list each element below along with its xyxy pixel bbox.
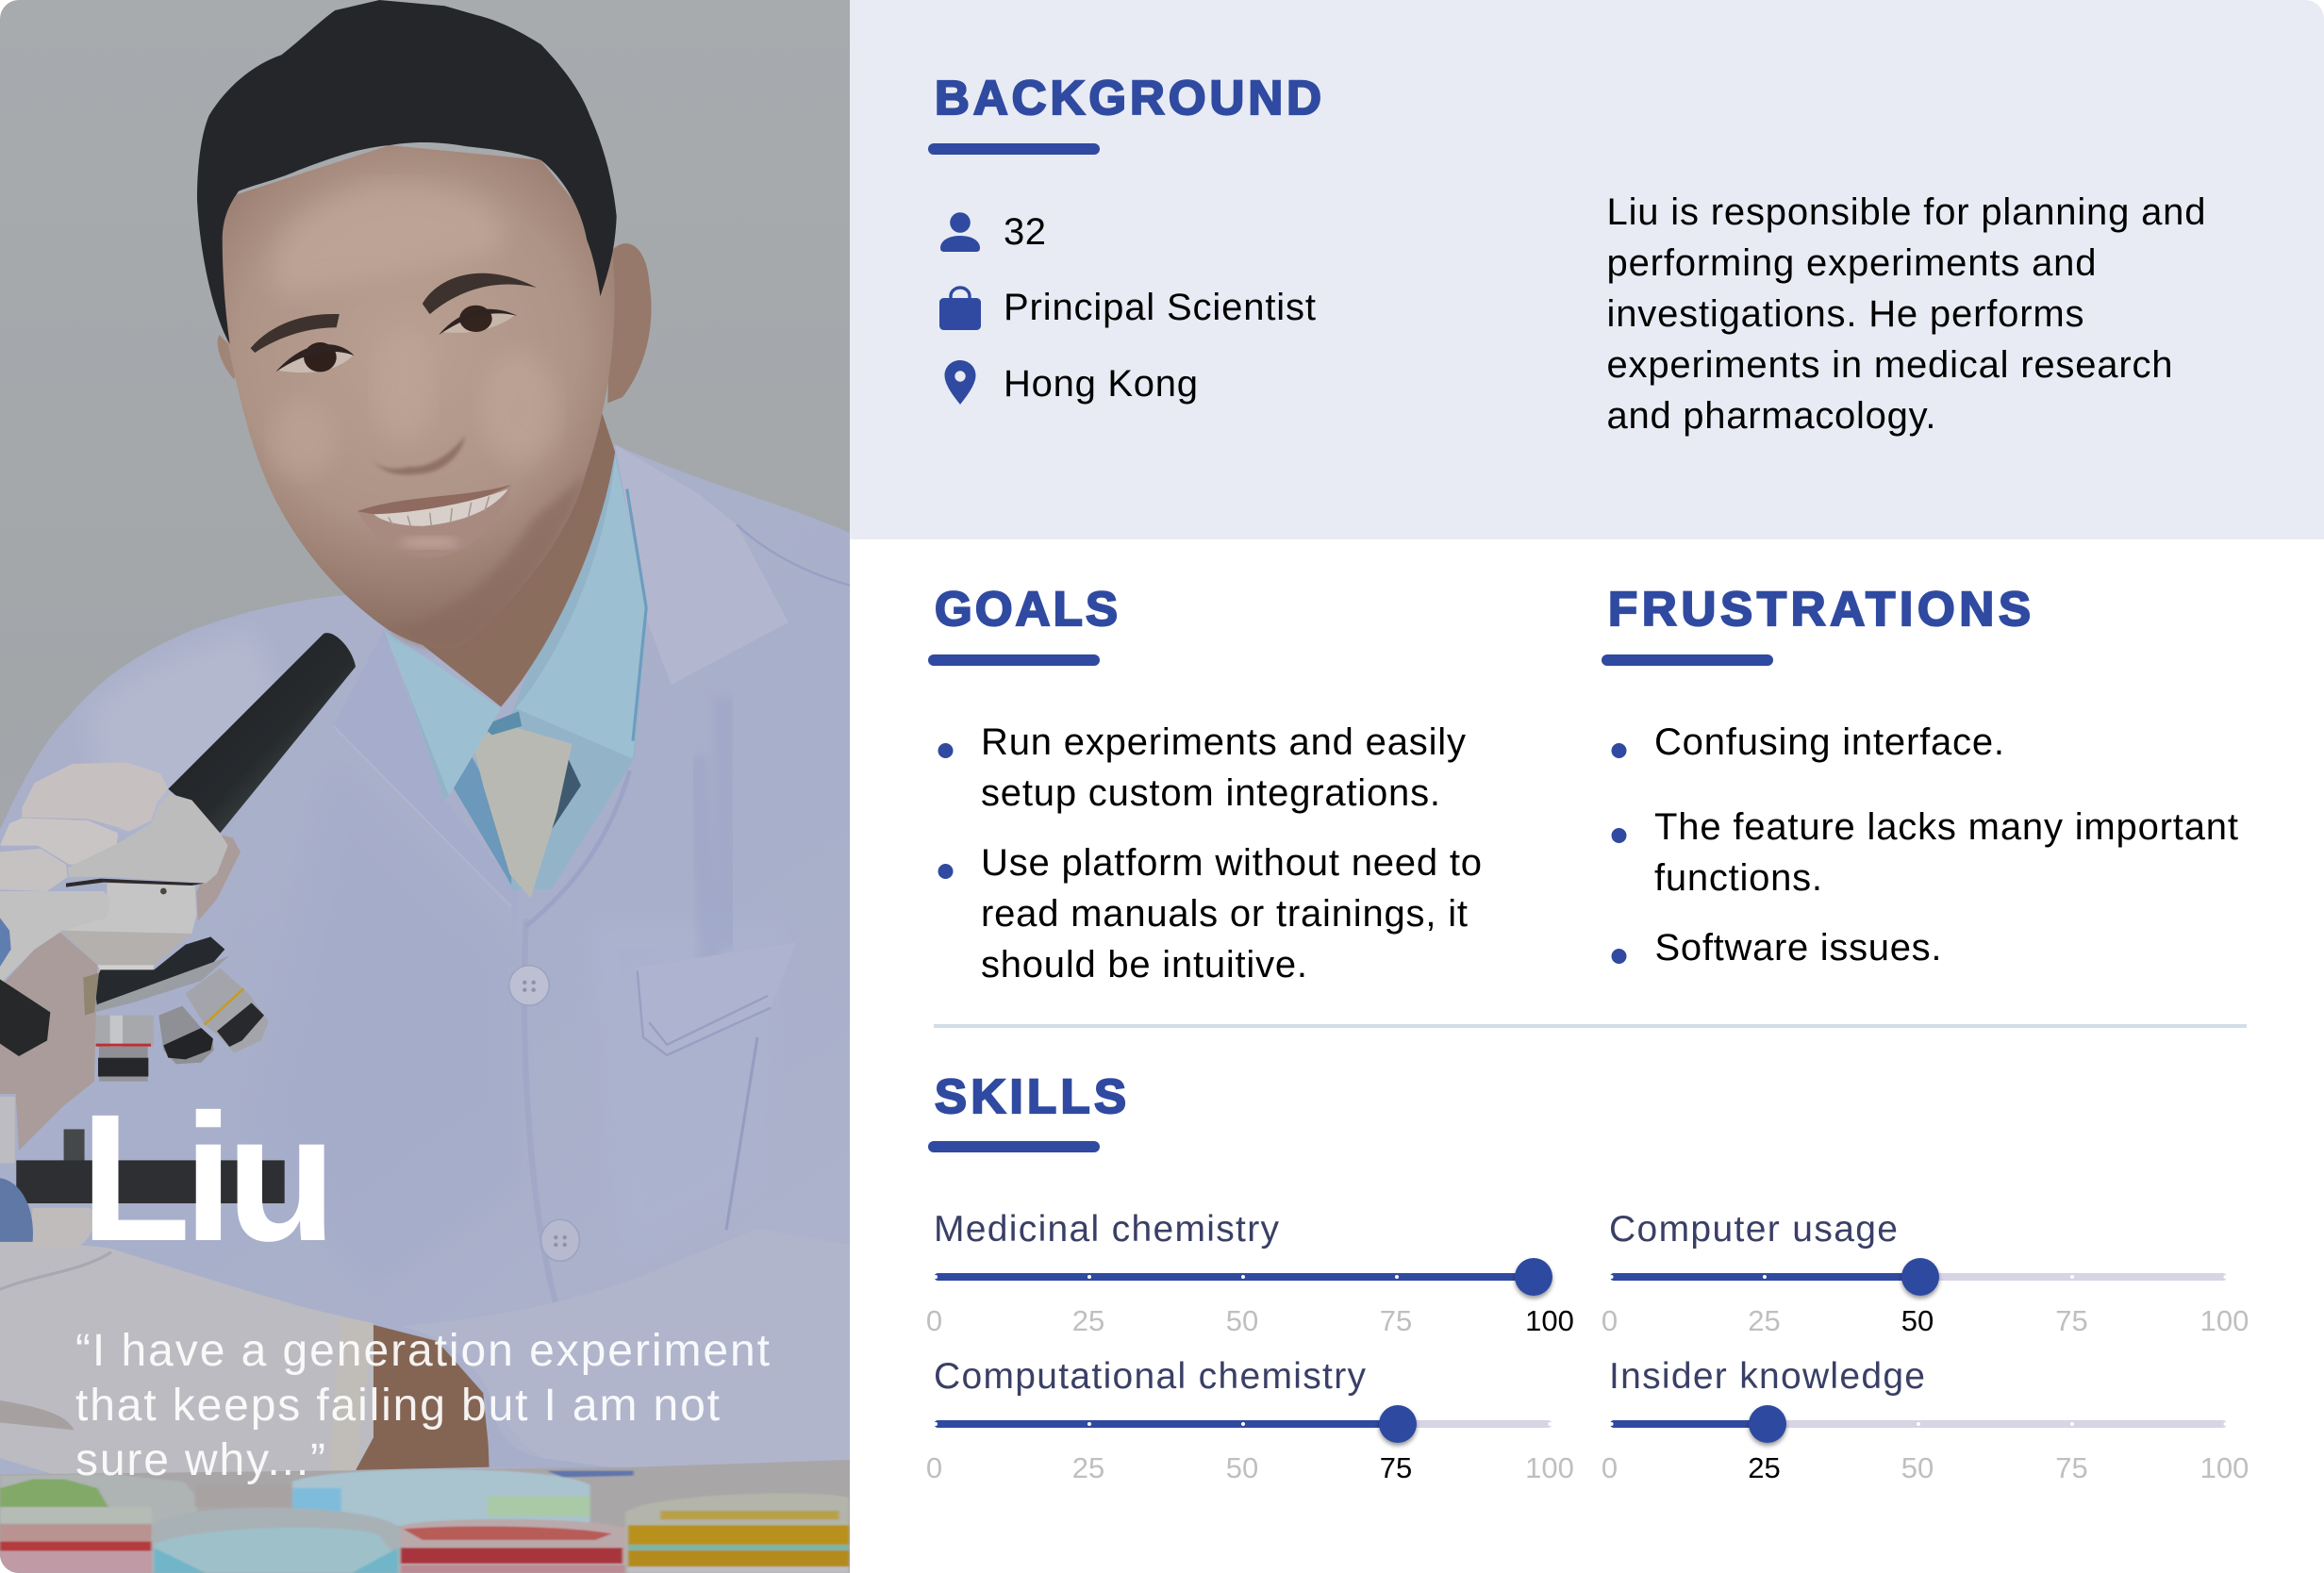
frustration 2: functions. bbox=[1654, 857, 1822, 899]
frustration 1: Confusing interface. bbox=[1654, 721, 2004, 763]
background description: investigations. He performs bbox=[1607, 293, 2084, 335]
frustration 2 bbox=[1611, 806, 2238, 899]
slider: computational chemistry: 50 bbox=[1226, 1451, 1258, 1484]
slider: computational chemistry: 0 bbox=[926, 1451, 942, 1484]
slider: computer usage: 75 bbox=[2055, 1304, 2088, 1337]
slider: medicinal chemistry: 75 bbox=[1380, 1304, 1412, 1337]
neck bbox=[423, 413, 615, 707]
icon: person bbox=[940, 212, 980, 252]
background description: Liu is responsible for planning and bbox=[1607, 191, 2205, 233]
slider: computational chemistry: 75 bbox=[1380, 1451, 1412, 1484]
goal 2 bbox=[938, 842, 1482, 985]
left eyebrow bbox=[251, 314, 340, 353]
background description: and pharmacology. bbox=[1607, 395, 1935, 437]
mouth bbox=[357, 485, 511, 522]
turret bbox=[94, 936, 224, 1009]
slider: computational chemistry: 25 bbox=[1072, 1451, 1104, 1484]
divider bbox=[934, 1024, 2247, 1028]
section: frustrations bbox=[1602, 582, 2238, 969]
sleeve bbox=[553, 1301, 566, 1328]
icon: briefcase bbox=[939, 288, 981, 330]
quote bbox=[75, 1326, 770, 1485]
location: Hong Kong bbox=[1004, 363, 1198, 405]
slider: medicinal chemistry: 25 bbox=[1072, 1304, 1104, 1337]
goal 1: Run experiments and easily bbox=[981, 721, 1466, 763]
frustration 2: The feature lacks many important bbox=[1654, 806, 2238, 848]
gloved hand on table bbox=[0, 1237, 374, 1488]
slider: computational chemistry: 100 bbox=[1525, 1451, 1574, 1484]
slider: medicinal chemistry: Medicinal chemistry bbox=[934, 1209, 1279, 1250]
quote: that keeps failing but I am not bbox=[75, 1381, 720, 1431]
age: 32 bbox=[1004, 211, 1046, 253]
ear left bbox=[217, 335, 235, 379]
icon: map pin bbox=[945, 360, 975, 405]
red dish bbox=[401, 1519, 628, 1573]
background description bbox=[1607, 191, 2205, 437]
objective 1 bbox=[96, 1016, 154, 1047]
teal dish bbox=[152, 1508, 401, 1573]
goal 2: read manuals or trainings, it bbox=[981, 893, 1468, 935]
cyan dish bbox=[292, 1469, 590, 1526]
slider: medicinal chemistry bbox=[926, 1209, 1574, 1337]
table bbox=[0, 1460, 851, 1573]
forearm wrist bbox=[356, 1323, 490, 1470]
quote: sure why...” bbox=[75, 1435, 325, 1485]
microscope bbox=[0, 633, 356, 1151]
sleeve shadow bbox=[547, 1471, 634, 1477]
job title: Principal Scientist bbox=[1004, 287, 1316, 328]
hair bbox=[197, 0, 617, 344]
yellow dish bbox=[625, 1493, 849, 1573]
objective 3 bbox=[186, 969, 269, 1053]
heading: skills: SKILLS bbox=[935, 1069, 1126, 1123]
heading rule bbox=[928, 654, 1100, 666]
lab coat bbox=[0, 444, 851, 1489]
goal 2: Use platform without need to bbox=[981, 842, 1482, 884]
pocket bbox=[636, 954, 772, 1230]
section: goals bbox=[928, 582, 1482, 985]
heading rule bbox=[1602, 654, 1773, 666]
slider: insider knowledge: 25 bbox=[1748, 1451, 1781, 1484]
background description: performing experiments and bbox=[1607, 242, 2096, 284]
objective 2 bbox=[158, 1006, 214, 1064]
background description: experiments in medical research bbox=[1607, 344, 2173, 386]
panel: background bbox=[850, 0, 2324, 539]
petri dishes bbox=[0, 1469, 849, 1573]
slider: insider knowledge: 100 bbox=[2200, 1451, 2249, 1484]
heading rule bbox=[928, 1141, 1100, 1152]
slider: insider knowledge: 75 bbox=[2055, 1451, 2088, 1484]
fingers bbox=[22, 762, 168, 832]
panel: portrait photo of Liu bbox=[0, 0, 851, 1573]
slider: medicinal chemistry: 0 bbox=[926, 1304, 942, 1337]
tube bbox=[168, 633, 356, 833]
name: Liu: Liu bbox=[80, 1076, 337, 1279]
slider: medicinal chemistry: 50 bbox=[1226, 1304, 1258, 1337]
goal 2: should be intuitive. bbox=[981, 944, 1307, 985]
heading rule bbox=[928, 143, 1100, 155]
slider: insider knowledge: 0 bbox=[1602, 1451, 1618, 1484]
shirt and tie bbox=[384, 452, 648, 898]
glove behind bbox=[0, 932, 97, 1151]
coat buttons bbox=[509, 966, 579, 1261]
heading: goals: GOALS bbox=[935, 582, 1118, 636]
left eye bbox=[279, 352, 353, 373]
slider: computational chemistry: Computational chemistry bbox=[934, 1356, 1366, 1397]
slider: computer usage: 50 bbox=[1901, 1304, 1934, 1337]
microscope stage bbox=[0, 1097, 285, 1242]
section: skills bbox=[926, 1069, 2249, 1484]
slider: computational chemistry bbox=[926, 1356, 1574, 1484]
slider: computer usage: 0 bbox=[1602, 1304, 1618, 1337]
jaw shadow bbox=[389, 474, 586, 648]
ear right bbox=[607, 243, 652, 403]
slider: computer usage: 100 bbox=[2200, 1304, 2249, 1337]
slider: computer usage bbox=[1602, 1209, 2249, 1337]
slider: insider knowledge: 50 bbox=[1901, 1451, 1934, 1484]
goal 1 bbox=[938, 721, 1466, 814]
goal 1: setup custom integrations. bbox=[981, 772, 1440, 814]
quote: “I have a generation experiment bbox=[75, 1326, 770, 1376]
right eye bbox=[443, 313, 514, 333]
slider: computer usage: Computer usage bbox=[1609, 1209, 1898, 1250]
table gap bbox=[195, 1485, 298, 1507]
head bbox=[68, 794, 228, 884]
right eyebrow bbox=[423, 273, 537, 314]
frustration 3: Software issues. bbox=[1654, 927, 1941, 969]
slider: computer usage: 25 bbox=[1748, 1304, 1781, 1337]
left dish bbox=[0, 1474, 200, 1573]
slider: insider knowledge bbox=[1602, 1356, 2249, 1484]
heading: frustrations: FRUSTRATIONS bbox=[1608, 582, 2031, 636]
heading: background: BACKGROUND bbox=[935, 71, 1321, 124]
slider: insider knowledge: Insider knowledge bbox=[1609, 1356, 1925, 1397]
nose bbox=[377, 438, 466, 476]
finger under stage bbox=[32, 1207, 92, 1245]
slider: medicinal chemistry: 100 bbox=[1525, 1304, 1574, 1337]
face bbox=[197, 0, 617, 648]
